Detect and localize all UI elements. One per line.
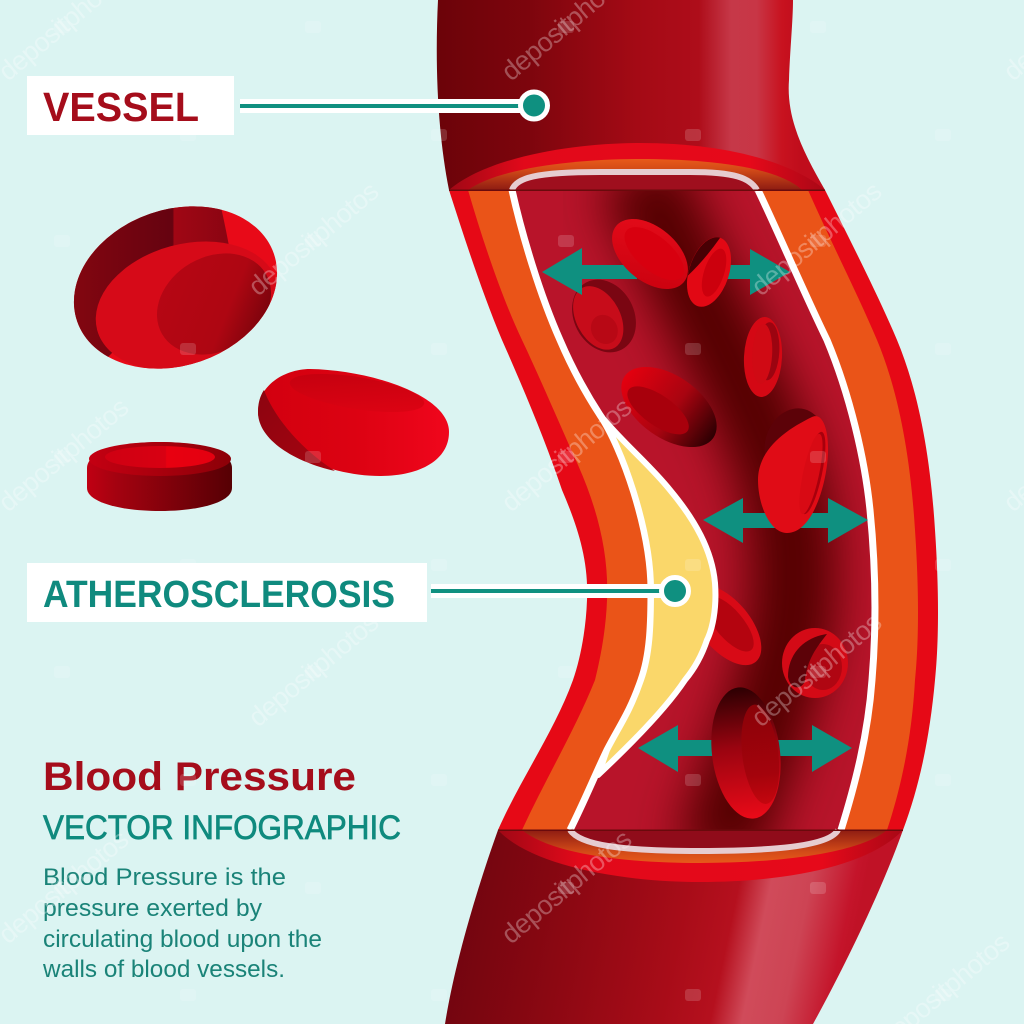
lower vessel tube (445, 830, 903, 1024)
description text: Blood Pressure is the (43, 864, 286, 891)
label: ATHEROSCLEROSIS: ATHEROSCLEROSIS (43, 574, 395, 616)
description text (42, 864, 322, 983)
subheading: VECTOR INFOGRAPHIC: VECTOR INFOGRAPHIC (43, 809, 401, 847)
upper vessel cap (449, 143, 825, 191)
free red blood cell: large (74, 206, 278, 369)
arrow: upper right (727, 249, 790, 295)
watermarks: depositphotos (746, 176, 887, 302)
vessel (437, 0, 938, 1024)
red blood cells behind arrows (560, 268, 848, 698)
cell 7 (675, 572, 775, 678)
description text: pressure exerted by (43, 895, 263, 922)
inner wall line right (758, 190, 875, 830)
plaque: atherosclerosis (598, 415, 715, 775)
cell 2 (679, 232, 739, 312)
arrow: lower double (638, 725, 852, 772)
free red blood cell: tilted (258, 367, 449, 476)
cell 5 (607, 351, 731, 463)
watermarks: depositphotos (746, 607, 887, 733)
upper vessel tube (437, 0, 825, 190)
heading: Blood Pressure: Blood Pressure (43, 755, 356, 799)
watermarks: depositphotos (496, 824, 637, 950)
watermarks: depositphotos (243, 607, 384, 733)
description text: walls of blood vessels. (42, 956, 285, 983)
description text: circulating blood upon the (43, 926, 322, 953)
cell 9 (704, 683, 788, 823)
outer red wall (449, 190, 938, 830)
orange wall layer (468, 190, 918, 830)
cell 8 (782, 628, 848, 698)
leader line: ATHEROSCLEROSIS (431, 578, 688, 604)
arrow: upper left (542, 248, 637, 295)
vessel lumen (512, 190, 875, 830)
lower vessel cap (498, 830, 903, 882)
label: ATHEROSCLEROSIS (27, 563, 427, 622)
watermarks: depositphotos (496, 392, 637, 518)
cell 3 (560, 268, 648, 364)
label: VESSEL (27, 76, 234, 135)
lumen inner shadow (640, 170, 794, 860)
foreground cells over arrows (599, 205, 834, 823)
leader line: VESSEL (240, 92, 548, 119)
cell 4 (742, 316, 784, 398)
inner wall line left (512, 190, 651, 830)
cell 1 (599, 205, 701, 303)
cell 6 (756, 401, 834, 533)
free red blood cell: flat disc (87, 442, 232, 511)
label: VESSEL: VESSEL (43, 84, 199, 130)
arrow: middle double (703, 498, 868, 543)
watermarks: depositphotos (243, 176, 384, 302)
